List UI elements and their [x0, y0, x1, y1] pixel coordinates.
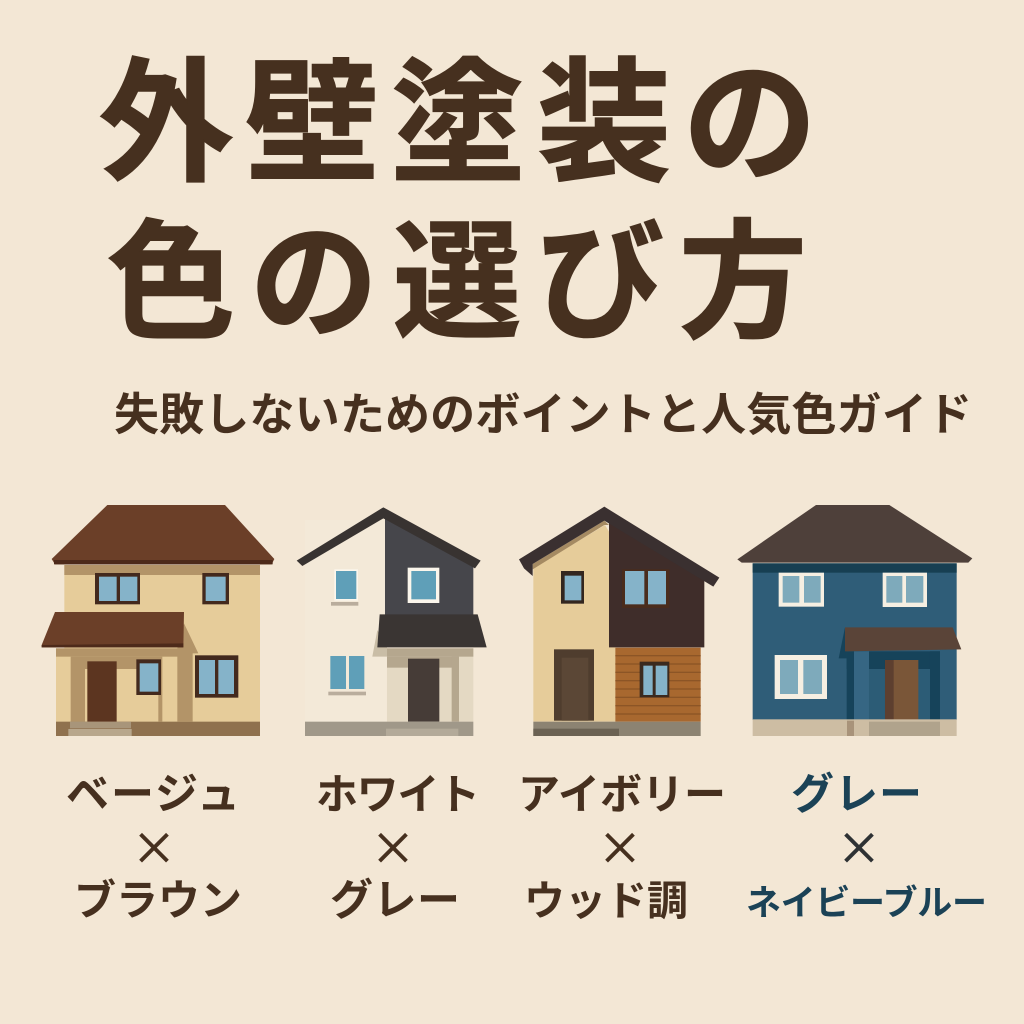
label: white x gray: グレー: [330, 877, 460, 925]
label: gray x navy blue: [746, 771, 987, 923]
house: beige x brown: [42, 505, 274, 736]
title: 外壁塗装の: [99, 50, 817, 199]
house: gray x navy blue: [737, 505, 972, 736]
label: ivory x wood: ×: [598, 813, 642, 877]
label: ivory x wood: アイボリー: [518, 771, 726, 818]
label: ivory x wood: ウッド調: [524, 878, 688, 924]
label: white x gray: [316, 771, 480, 925]
title: [99, 50, 817, 355]
label: beige x brown: [66, 771, 242, 924]
label: ivory x wood: [518, 771, 726, 924]
house: ivory x wood: [519, 507, 719, 736]
label: gray x navy blue: ×: [837, 813, 881, 877]
label: white x gray: ホワイト: [316, 771, 480, 818]
label: beige x brown: ベージュ: [66, 771, 240, 819]
label: beige x brown: ブラウン: [74, 877, 242, 924]
label: gray x navy blue: グレー: [791, 771, 922, 819]
label: gray x navy blue: ネイビーブルー: [746, 883, 987, 923]
house: white x gray: [297, 507, 487, 736]
subtitle: 失敗しないためのボイントと人気色ガイド: [114, 389, 972, 440]
label: white x gray: ×: [371, 813, 415, 877]
title: 色の選び方: [107, 212, 807, 355]
label: beige x brown: ×: [132, 813, 176, 877]
